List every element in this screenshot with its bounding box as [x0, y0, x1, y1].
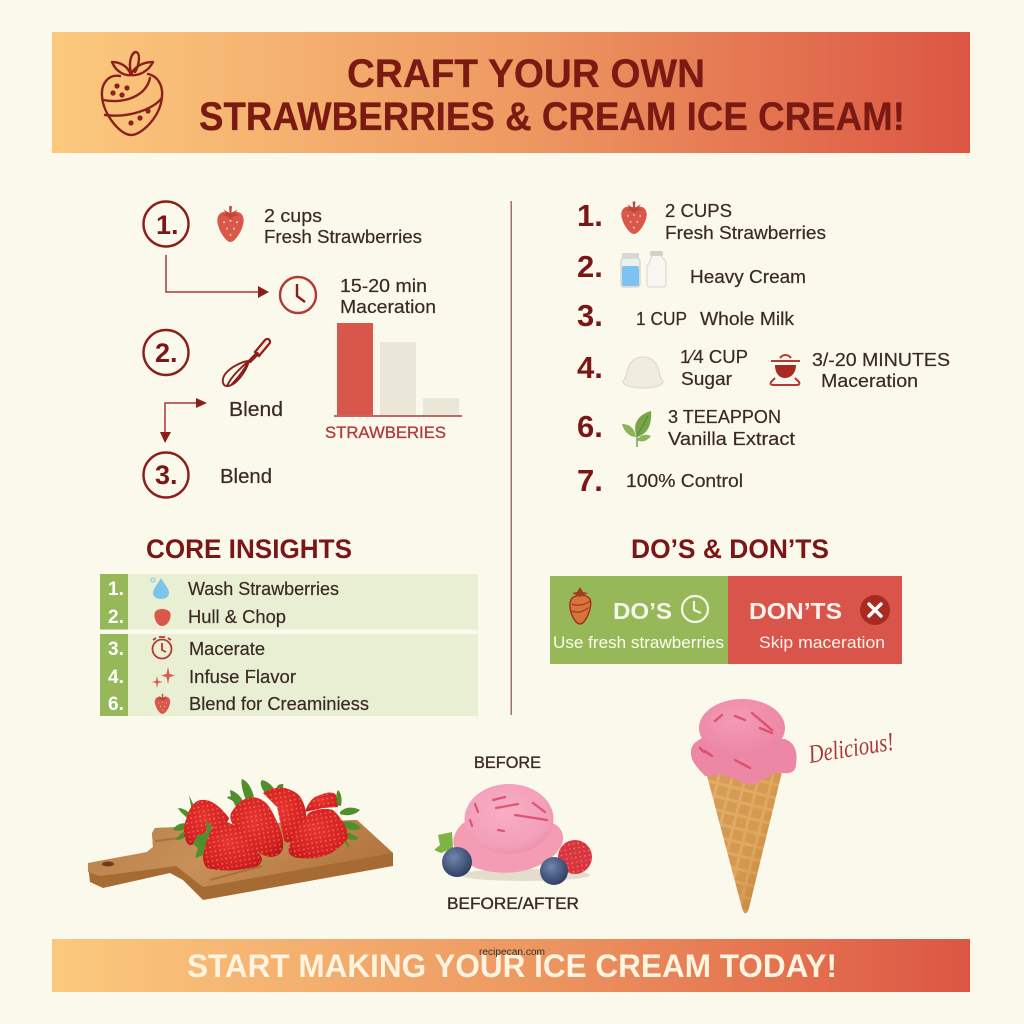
arrow: step 2 to step 3 [160, 398, 207, 443]
do's text: Use fresh strawberries [553, 633, 724, 652]
ingredient 6 text: Vanilla Extract [668, 428, 795, 449]
ingredient 6 text [668, 406, 795, 449]
step 1 text [264, 205, 422, 247]
bar chart: STRAWBERIES [325, 424, 446, 442]
center divider [510, 201, 512, 715]
don'ts box [728, 576, 902, 664]
step 1 badge [144, 202, 188, 246]
ingredient numbers: 4. [577, 350, 603, 385]
ingredient numbers: 1. [577, 198, 603, 233]
ingredient 7 text: 100% Control [626, 470, 743, 491]
strawberry leaves [173, 779, 361, 847]
row numbers: 3. [108, 639, 124, 660]
step 3 badge: 3. [155, 460, 178, 490]
icon: strawberry [155, 694, 170, 714]
cone [706, 772, 782, 913]
icon: chopped strawberry [154, 609, 171, 626]
strawberries [184, 788, 348, 870]
do's label: DO’S [613, 598, 672, 624]
icon: strawberry [621, 202, 647, 234]
callout: delicious: Delicious! [806, 727, 896, 769]
ingredient 1 text: Fresh Strawberries [665, 222, 826, 243]
maceration text: 15-20 min [340, 275, 427, 296]
footer banner [52, 939, 970, 992]
panel: core insights [100, 534, 478, 716]
maceration time text: Maceration [821, 370, 918, 391]
ingredient 4 text [680, 346, 748, 389]
icon: strawberry [570, 587, 591, 624]
row numbers: 1. [108, 579, 124, 600]
row labels: Infuse Flavor [189, 666, 296, 687]
blend label 2: Blend [220, 466, 272, 488]
don'ts label: DON’TS [749, 598, 842, 624]
icon: vanilla leaf [622, 411, 651, 447]
ingredient 4 text: Sugar [681, 368, 732, 389]
don'ts text: Skip maceration [759, 633, 885, 652]
title text: CRAFT YOUR OWN [347, 52, 705, 96]
ingredient 3 text [636, 308, 795, 329]
panel: do's and don'ts [550, 534, 902, 664]
maceration time text [812, 349, 950, 391]
step 2 badge: 2. [155, 338, 178, 368]
step 1 text: Fresh Strawberries [264, 226, 422, 247]
step 2 badge [144, 330, 188, 375]
photo: ice cream scoop with berries [434, 784, 592, 885]
heading: DO’S & DON’TS [631, 534, 829, 564]
icon: stopwatch [152, 637, 172, 658]
row numbers [108, 579, 124, 715]
ingredient 2 text: Heavy Cream [690, 266, 806, 287]
ingredient numbers: 7. [577, 463, 603, 498]
photo: ice cream cone [691, 699, 797, 913]
title banner [52, 32, 970, 153]
photo: strawberries on cutting board [88, 779, 393, 900]
row labels [188, 578, 369, 714]
source watermark: recipecan.com [479, 947, 545, 958]
row numbers: 4. [108, 667, 124, 688]
shadow [460, 869, 590, 881]
maceration text: Maceration [340, 296, 436, 317]
icon: sparkles [152, 667, 175, 688]
blend label: Blend [229, 399, 283, 421]
row numbers: 6. [108, 694, 124, 715]
ingredient numbers [577, 198, 603, 498]
panel: process steps [144, 202, 462, 498]
raspberry [558, 840, 592, 874]
maceration time text: 3/-20 MINUTES [812, 349, 950, 370]
ingredient 4 text: 1⁄4 CUP [680, 346, 748, 367]
ingredient 3 text: 1 CUP [636, 308, 687, 329]
heading: CORE INSIGHTS [146, 534, 352, 564]
title text: STRAWBERRIES & CREAM ICE CREAM! [199, 95, 905, 139]
rows group 2 [100, 634, 478, 716]
icon: outlined strawberry [102, 52, 162, 135]
icon: cross [860, 595, 890, 625]
row numbers: 2. [108, 607, 124, 628]
ingredient 3 text: Whole Milk [700, 308, 795, 329]
icon: sugar mound [623, 357, 663, 388]
bar chart [325, 323, 462, 442]
row labels: Macerate [189, 638, 265, 659]
rows group 1 [100, 574, 478, 630]
icon: water drop [151, 578, 169, 599]
icon: bottles [621, 251, 666, 287]
ingredient 6 text: 3 TEEAPPON [668, 406, 781, 427]
panel: ingredients list [577, 198, 950, 498]
row labels: Blend for Creaminiess [189, 693, 369, 714]
icon: maceration bowl [771, 355, 800, 385]
do's box [550, 576, 728, 664]
title text [199, 52, 905, 139]
before/after label: BEFORE/AFTER [447, 894, 579, 913]
step 1 badge: 1. [156, 210, 179, 240]
blueberries [442, 847, 568, 885]
row labels: Hull & Chop [188, 606, 286, 627]
ingredient 1 text [665, 200, 826, 243]
scoop [453, 784, 563, 873]
step 1 text: 2 cups [264, 205, 322, 226]
ingredient numbers: 6. [577, 409, 603, 444]
icon: whisk [223, 339, 270, 386]
mint leaves [434, 832, 453, 853]
footer call to action: START MAKING YOUR ICE CREAM TODAY! [187, 948, 837, 984]
icon: clock [682, 596, 708, 622]
ingredient numbers: 3. [577, 298, 603, 333]
ingredient 1 text: 2 CUPS [665, 200, 732, 221]
board [88, 820, 393, 900]
step 3 badge [144, 452, 188, 498]
icon: strawberry [217, 206, 244, 242]
row labels: Wash Strawberries [188, 578, 339, 599]
scoop [691, 699, 797, 785]
maceration text [340, 275, 436, 317]
ingredient numbers: 2. [577, 249, 603, 284]
before label: BEFORE [474, 753, 541, 772]
arrow: step 1 to maceration [166, 255, 269, 298]
icon: clock [280, 277, 316, 313]
